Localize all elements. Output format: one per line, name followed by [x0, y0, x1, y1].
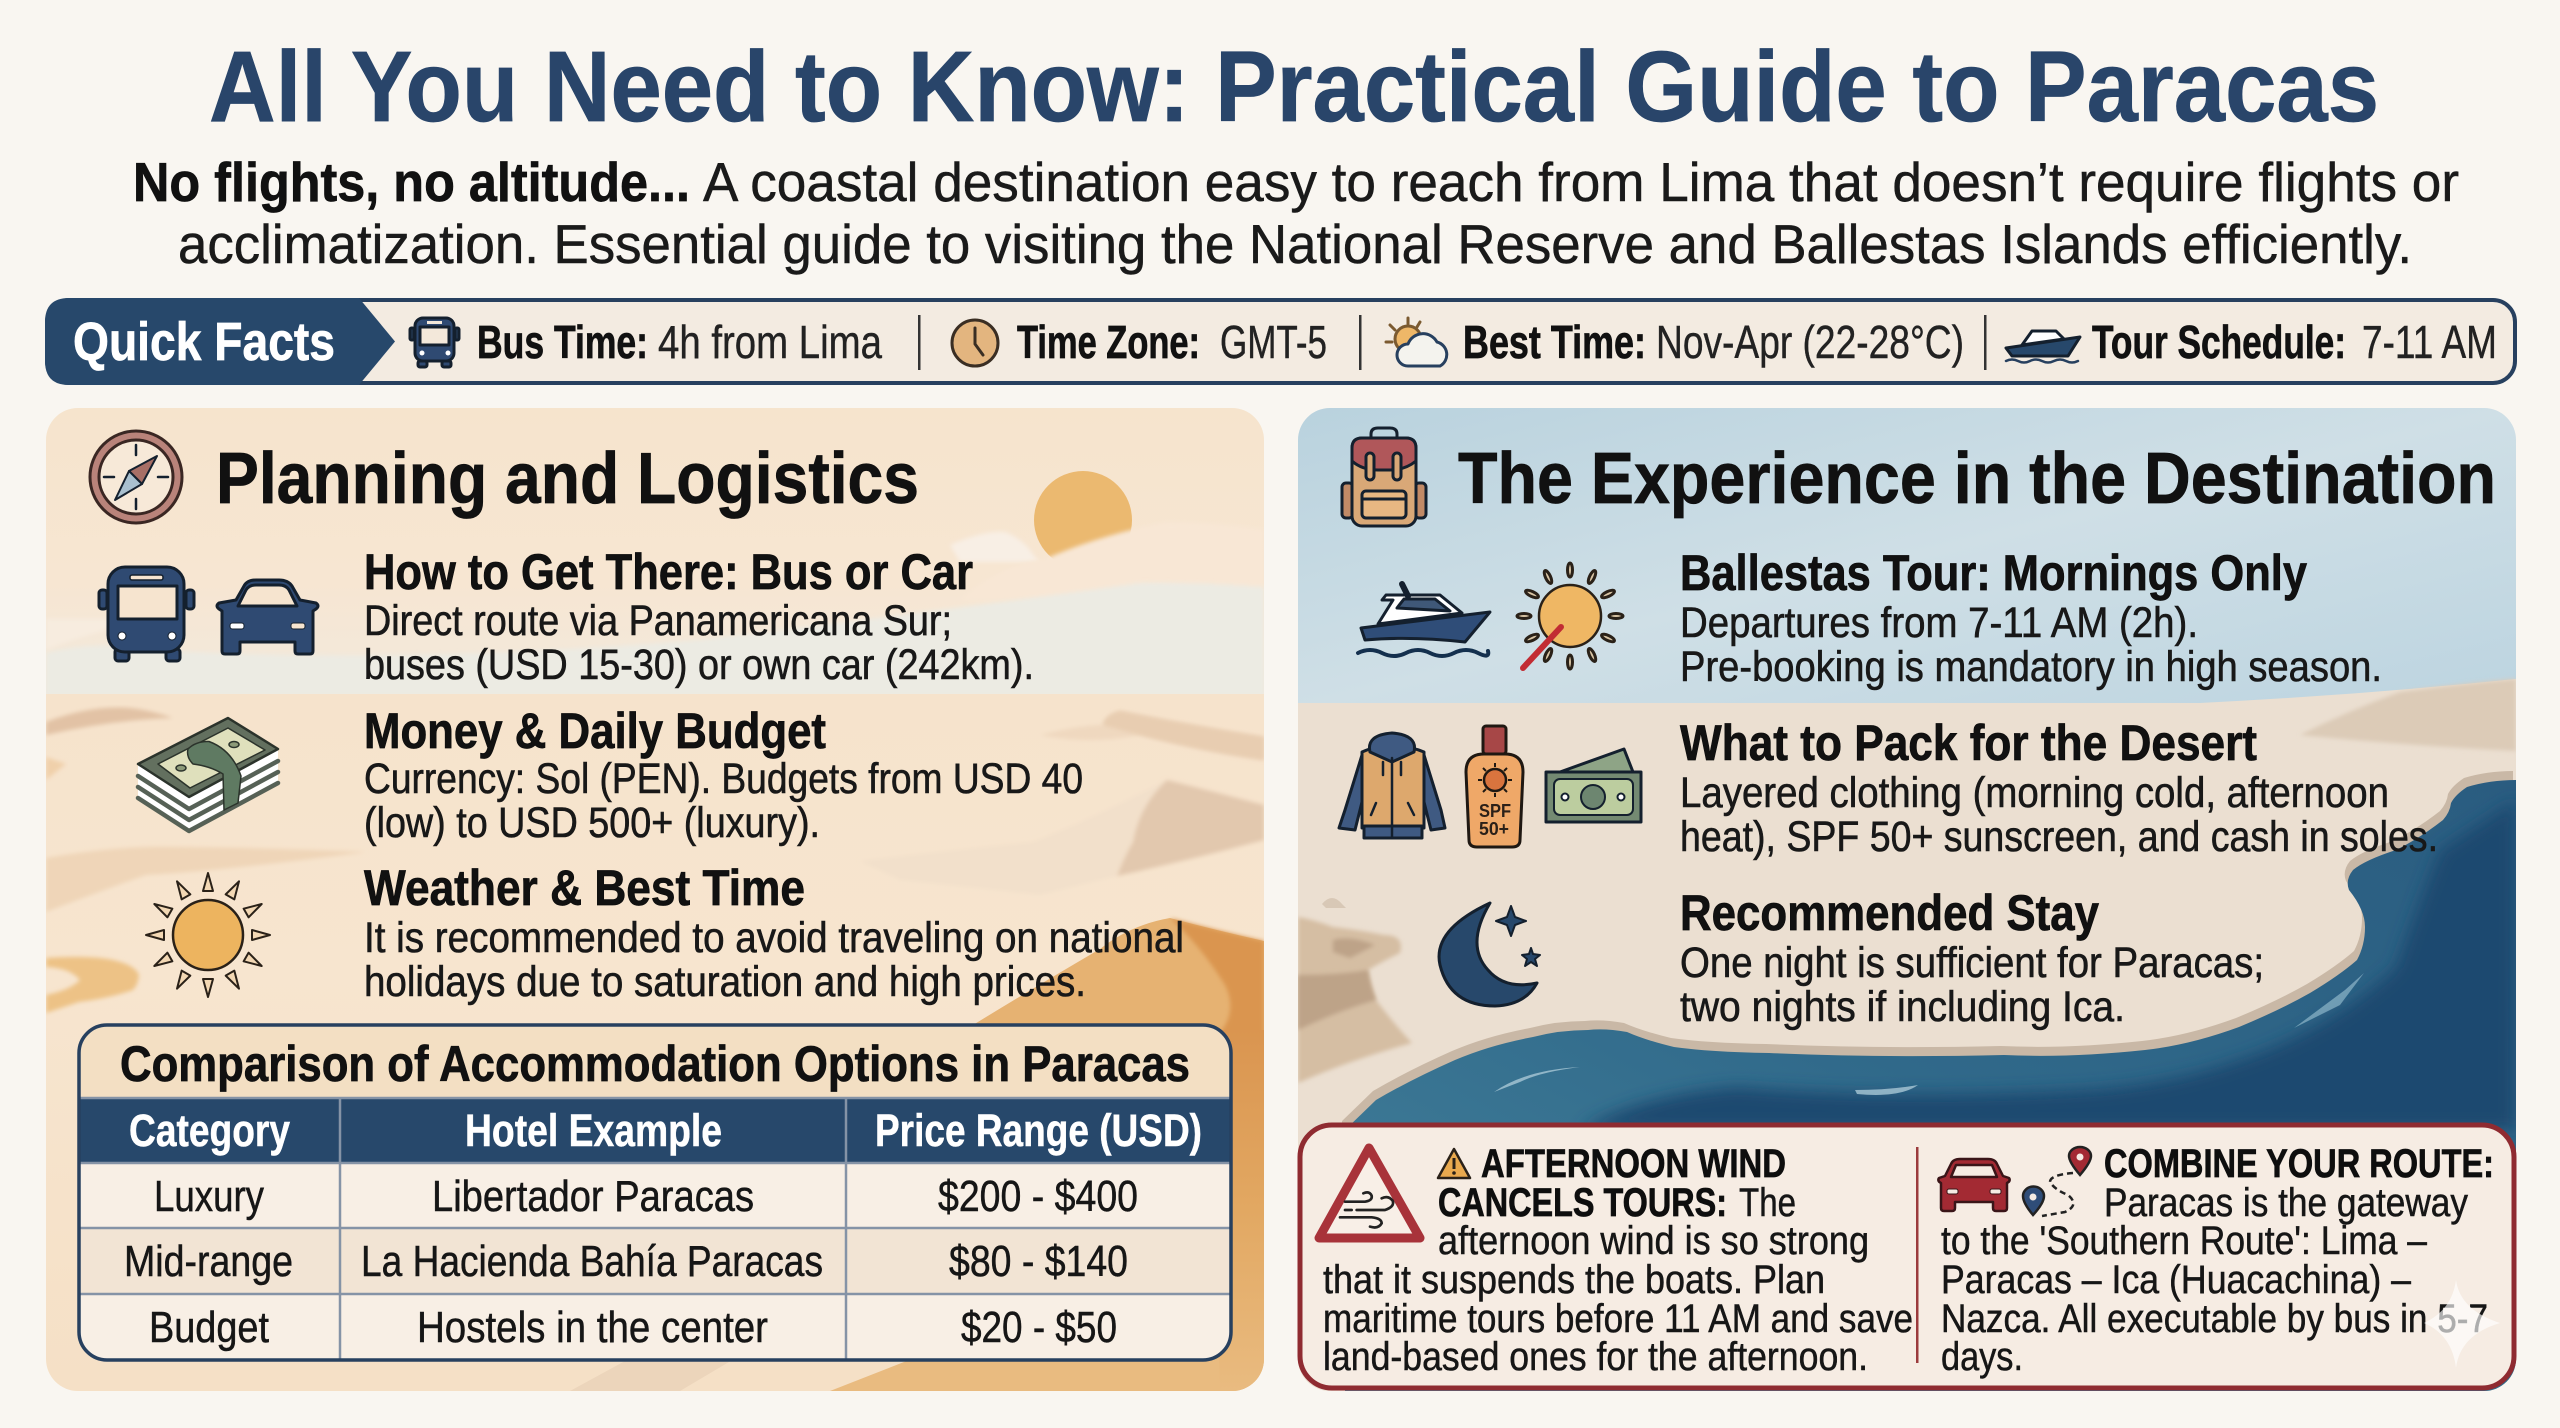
text: what to pack: [1680, 715, 2438, 861]
quick facts bar: [45, 298, 2515, 385]
heading: planning and logistics: Planning and Logistics: [216, 439, 919, 519]
subtitle: A coastal destination easy to reach from Lima that doesn’t require flights or: [703, 151, 2459, 213]
text: how to get there: How to Get There: Bus or Car: [364, 544, 973, 600]
icon: wind warning triangle: [1319, 1148, 1420, 1238]
icon: sunscreen: 50+: [1479, 819, 1509, 839]
table row: budget: $20 - $50: [961, 1303, 1117, 1352]
table header: Category: [129, 1105, 290, 1156]
table: accommodation comparison: [79, 1025, 1231, 1360]
bus time: 4h from Lima: [658, 316, 882, 368]
sparkle watermark: [2424, 1280, 2500, 1368]
text: how to get there: [364, 544, 1034, 689]
text: afternoon wind warning: CANCELS TOURS:: [1438, 1181, 1727, 1225]
text: recommended stay: [1680, 885, 2264, 1031]
subtitle: [133, 151, 2459, 275]
panel: the experience in the destination: [1298, 408, 2516, 1391]
icon: jacket: [1339, 733, 1445, 838]
table row: mid-range: La Hacienda Bahía Paracas: [361, 1237, 823, 1286]
table row: mid-range: $80 - $140: [949, 1237, 1128, 1286]
text: what to pack: What to Pack for the Desert: [1680, 715, 2257, 771]
subtitle: No flights, no altitude...: [133, 151, 690, 213]
icon: boat: [1358, 584, 1490, 656]
icon: sun with clock hand: [1517, 563, 1623, 669]
text: ballestas tour: Pre-booking is mandatory in high season.: [1680, 643, 2382, 691]
text: ballestas tour: [1680, 545, 2382, 691]
text: combine your route: to the 'Southern Route': Lima –: [1941, 1219, 2428, 1263]
best time: Best Time:: [1463, 316, 1646, 368]
text: weather and best time: holidays due to saturation and high prices.: [364, 958, 1086, 1006]
subtitle: acclimatization. Essential guide to visiting the National Reserve and Ballestas Islands efficiently.: [178, 213, 2412, 275]
text: afternoon wind warning: afternoon wind is so strong: [1438, 1219, 1869, 1263]
text: afternoon wind warning: [1323, 1142, 1913, 1379]
text: money and daily budget: (low) to USD 500+ (luxury).: [364, 799, 820, 847]
icon: bus: [99, 567, 194, 661]
text: how to get there: Direct route via Panamericana Sur;: [364, 597, 952, 645]
icon: compass: [90, 431, 182, 523]
title: All You Need to Know: Practical Guide to Paracas: [209, 31, 2379, 143]
icon: route with pins: [2023, 1147, 2091, 1216]
text: recommended stay: Recommended Stay: [1680, 885, 2099, 941]
icon: cash: [1546, 749, 1641, 822]
table row: mid-range: Mid-range: [124, 1237, 293, 1286]
text: money and daily budget: Currency: Sol (PEN). Budgets from USD 40: [364, 755, 1083, 803]
best time: Nov-Apr (22-28°C): [1656, 316, 1964, 368]
text: money and daily budget: Money & Daily Budget: [364, 703, 826, 759]
coastal illustration background: [1298, 408, 2516, 1391]
text: what to pack: heat), SPF 50+ sunscreen, and cash in soles.: [1680, 813, 2438, 861]
bus time: Bus Time:: [477, 316, 648, 368]
text: combine your route: Paracas – Ica (Huacachina) –: [1941, 1258, 2412, 1302]
table title: Comparison of Accommodation Options in Paracas: [120, 1036, 1190, 1092]
icon: moon and stars: [1439, 903, 1540, 1006]
text: afternoon wind warning: AFTERNOON WIND: [1481, 1142, 1786, 1186]
icon: red car: [1938, 1159, 2010, 1211]
text: ballestas tour: Departures from 7-11 AM (2h).: [1680, 599, 2198, 647]
text: afternoon wind warning: land-based ones for the afternoon.: [1323, 1335, 1868, 1379]
icon: bus: [410, 318, 459, 367]
table row: budget: Budget: [149, 1303, 269, 1352]
text: afternoon wind warning: that it suspends the boats. Plan: [1323, 1258, 1825, 1302]
text: combine your route: Nazca. All executable by bus in 5-7: [1941, 1297, 2488, 1341]
text: afternoon wind warning: The: [1739, 1181, 1796, 1225]
table header: Price Range (USD): [875, 1105, 1202, 1156]
quick facts label: [45, 298, 395, 385]
text: afternoon wind warning: maritime tours before 11 AM and save: [1323, 1297, 1913, 1341]
text: ballestas tour: Ballestas Tour: Mornings Only: [1680, 545, 2307, 601]
icon: boat: [2006, 331, 2080, 362]
icon: sunscreen: SPF: [1479, 801, 1511, 821]
text: weather and best time: [364, 860, 1184, 1006]
text: weather and best time: Weather & Best Time: [364, 860, 805, 916]
table header: Hotel Example: [465, 1105, 722, 1156]
tour schedule: Tour Schedule:: [2092, 316, 2346, 368]
callout: warnings: [1300, 1125, 2514, 1388]
text: weather and best time: It is recommended to avoid traveling on national: [364, 914, 1184, 962]
text: recommended stay: One night is sufficient for Paracas;: [1680, 939, 2264, 987]
bus time: [477, 316, 882, 368]
text: combine your route: Paracas is the gateway: [2104, 1181, 2468, 1225]
table row: luxury: Luxury: [154, 1172, 264, 1221]
icon: sun: [146, 873, 270, 997]
time zone: Time Zone:: [1017, 316, 1200, 368]
table row: luxury: Libertador Paracas: [432, 1172, 754, 1221]
text: what to pack: Layered clothing (morning cold, afternoon: [1680, 769, 2389, 817]
quick facts label: Quick Facts: [73, 312, 335, 372]
best time: [1463, 316, 1964, 368]
table row: luxury: [154, 1172, 1138, 1221]
panel: planning and logistics: [46, 408, 1264, 1391]
text: recommended stay: two nights if including Ica.: [1680, 983, 2125, 1031]
time zone: GMT-5: [1220, 316, 1327, 368]
table row: mid-range: [124, 1237, 1128, 1286]
table row: budget: [149, 1303, 1117, 1352]
text: combine your route: [1941, 1142, 2494, 1379]
icon: sunscreen: [1466, 726, 1523, 847]
text: money and daily budget: [364, 703, 1083, 847]
icon: small warning: [1438, 1149, 1470, 1178]
icon: clock: [952, 320, 998, 366]
icon: backpack: [1342, 428, 1426, 526]
table row: luxury: $200 - $400: [938, 1172, 1138, 1221]
table header: [129, 1105, 1202, 1156]
tour schedule: 7-11 AM: [2362, 316, 2497, 368]
icon: car: [217, 580, 318, 654]
table row: budget: Hostels in the center: [417, 1303, 768, 1352]
desert illustration background: [46, 408, 1264, 1391]
icon: money stack: [138, 718, 278, 831]
icon: sun and cloud: [1386, 318, 1447, 366]
text: combine your route: days.: [1941, 1335, 2023, 1379]
text: how to get there: buses (USD 15-30) or own car (242km).: [364, 641, 1034, 689]
